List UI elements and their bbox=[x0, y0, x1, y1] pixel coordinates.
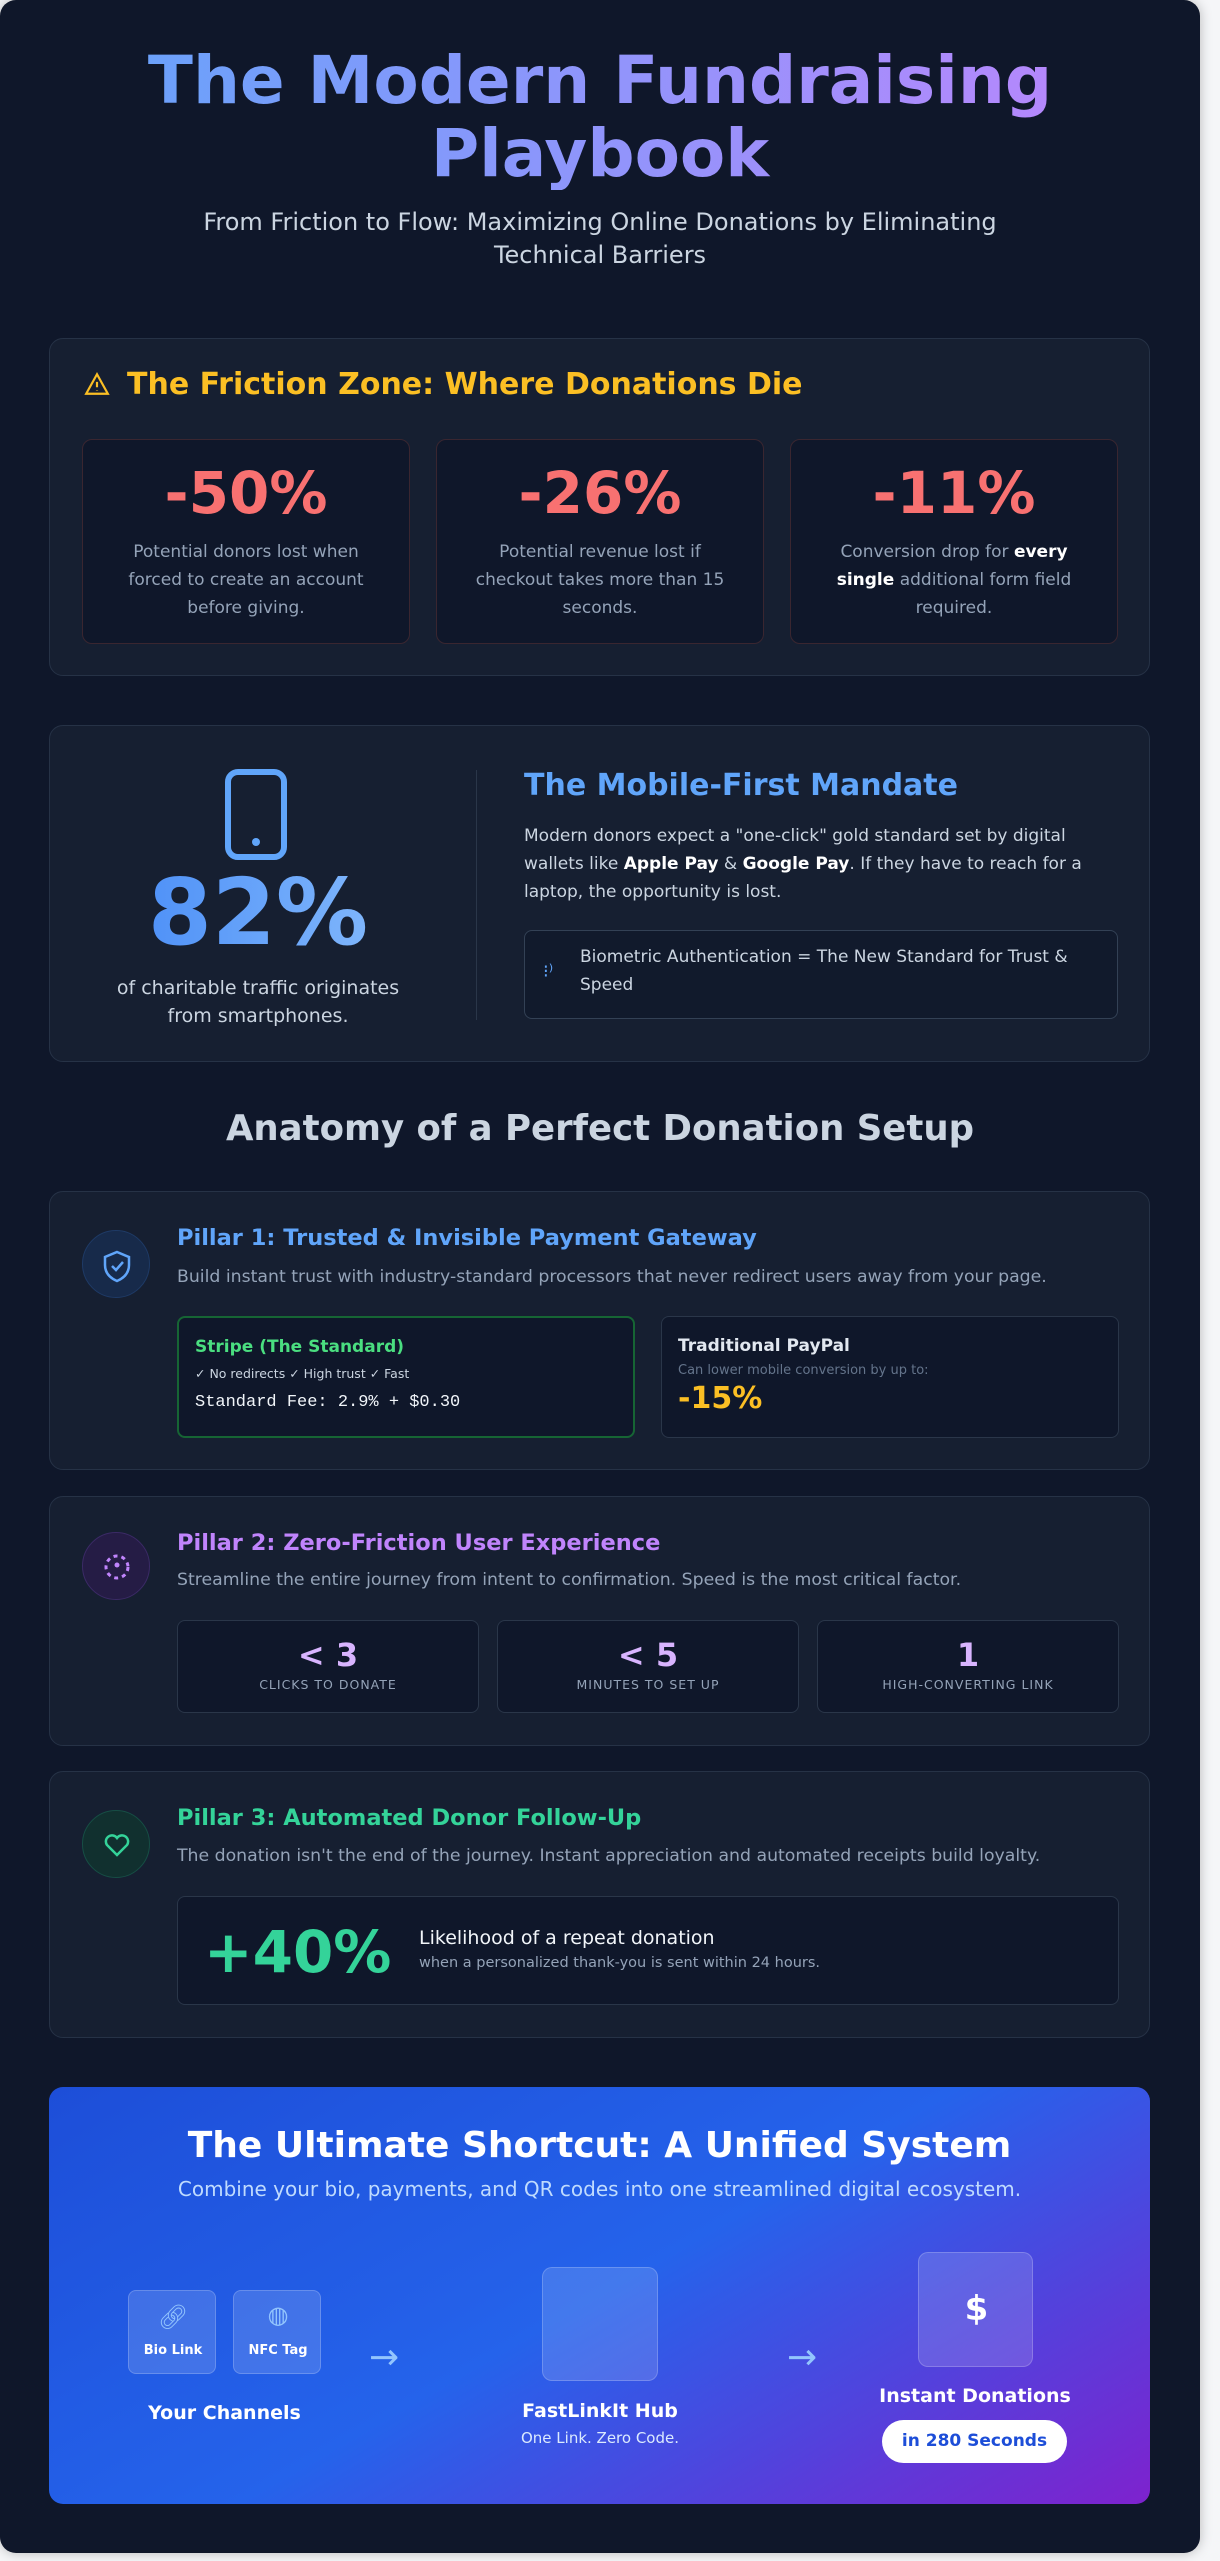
stat card 2 bbox=[436, 439, 764, 644]
icon: phone bbox=[225, 769, 287, 860]
panel: ultimate shortcut bbox=[49, 2087, 1150, 2504]
icon: shield bbox=[82, 1230, 150, 1298]
hub: One Link. Zero Code. bbox=[521, 2429, 679, 2447]
stat card 3: -11% bbox=[873, 459, 1035, 527]
tile: nfc tag: ◍ bbox=[268, 2301, 288, 2329]
hub bbox=[521, 2267, 679, 2447]
channels group bbox=[128, 2290, 321, 2424]
stripe box bbox=[177, 1316, 635, 1438]
stat card 1: Potential donors lost when forced to create an account before giving. bbox=[128, 542, 364, 618]
label: your channels: Your Channels bbox=[148, 2402, 301, 2424]
big stat 82% bbox=[50, 858, 466, 968]
stripe box: ✓ No redirects ✓ High trust ✓ Fast bbox=[195, 1366, 409, 1381]
pill: in 280 Seconds bbox=[902, 2431, 1047, 2451]
stat: link: 1 bbox=[957, 1636, 979, 1674]
cta subtitle: Combine your bio, payments, and QR codes into one streamlined digital ecosystem. bbox=[178, 2177, 1021, 2201]
pillar 2 title: Pillar 2: Zero-Friction User Experience bbox=[177, 1530, 660, 1556]
stat card 3: Conversion drop for every single additional form field required. bbox=[837, 542, 1071, 618]
instant donations: Instant Donations bbox=[879, 2385, 1071, 2407]
stat: clicks: CLICKS TO DONATE bbox=[259, 1677, 397, 1692]
tile: nfc tag bbox=[233, 2290, 321, 2374]
repeat donation box: Likelihood of a repeat donation bbox=[419, 1927, 715, 1949]
title: Playbook bbox=[431, 115, 769, 192]
big stat 82%: 82% bbox=[148, 859, 368, 966]
pillar 3 title: Pillar 3: Automated Donor Follow-Up bbox=[177, 1805, 641, 1831]
tile: bio link: 🔗︎ bbox=[158, 2303, 188, 2331]
caption: of charitable traffic originates from smartphones. bbox=[117, 977, 399, 1027]
stat: clicks: < 3 bbox=[298, 1636, 358, 1674]
cta title: The Ultimate Shortcut: A Unified System bbox=[188, 2125, 1011, 2166]
pillar 1 desc: Build instant trust with industry-standard processors that never redirect users away from your page. bbox=[177, 1267, 1047, 1287]
pillar 3 desc: The donation isn't the end of the journey. Instant appreciation and automated receipts build loyalty. bbox=[177, 1846, 1040, 1866]
panel: pillar 3 bbox=[49, 1771, 1150, 2038]
stat card 2: Potential revenue lost if checkout takes more than 15 seconds. bbox=[476, 542, 724, 618]
title: The Modern Fundraising bbox=[148, 42, 1052, 119]
arrow 1: → bbox=[369, 2337, 399, 2378]
callout: biometric bbox=[524, 930, 1118, 1019]
stat card 1: -50% bbox=[165, 459, 327, 527]
stat: clicks bbox=[177, 1620, 479, 1713]
icon: focus bbox=[82, 1532, 150, 1600]
instant donations: $ bbox=[965, 2289, 988, 2329]
paypal box: Can lower mobile conversion by up to: bbox=[678, 1363, 929, 1378]
icon: fingerprint: ⁝⁾ bbox=[543, 961, 553, 982]
stat card 3 bbox=[790, 439, 1118, 644]
panel: pillar 2 bbox=[49, 1496, 1150, 1746]
callout: biometric: Biometric Authentication = The New Standard for Trust & Speed bbox=[580, 947, 1068, 995]
pillar 2 desc: Streamline the entire journey from intent to confirmation. Speed is the most critical factor. bbox=[177, 1570, 961, 1590]
tile: bio link: Bio Link bbox=[144, 2343, 202, 2358]
paragraph: Modern donors expect a "one-click" gold standard set by digital wallets like Apple Pay & Google Pay. If they have to reach for a laptop, the opportunity is lost. bbox=[524, 826, 1082, 902]
stripe box: Stripe (The Standard) bbox=[195, 1337, 404, 1357]
panel: mobile-first bbox=[49, 725, 1150, 1062]
tile: bio link bbox=[128, 2290, 216, 2374]
stripe box: Standard Fee: 2.9% + $0.30 bbox=[195, 1393, 460, 1412]
panel: pillar 1 bbox=[49, 1191, 1150, 1470]
stat: minutes: < 5 bbox=[618, 1636, 678, 1674]
heading: anatomy: Anatomy of a Perfect Donation Setup bbox=[226, 1108, 974, 1149]
paypal box: Traditional PayPal bbox=[678, 1336, 850, 1356]
repeat donation box: when a personalized thank-you is sent within 24 hours. bbox=[419, 1955, 820, 1971]
subtitle: From Friction to Flow: Maximizing Online Donations by Eliminating Technical Barriers bbox=[203, 208, 997, 269]
paypal box bbox=[661, 1316, 1119, 1438]
stat: link: HIGH-CONVERTING LINK bbox=[882, 1677, 1054, 1692]
hub: FastLinkIt Hub bbox=[522, 2400, 678, 2422]
repeat donation box: +40% bbox=[204, 1918, 391, 1986]
stat: minutes bbox=[497, 1620, 799, 1713]
pillar 1 title: Pillar 1: Trusted & Invisible Payment Gateway bbox=[177, 1225, 757, 1251]
instant donations bbox=[879, 2252, 1071, 2463]
heading: friction zone: The Friction Zone: Where Donations Die bbox=[127, 367, 803, 402]
stat card 2: -26% bbox=[519, 459, 681, 527]
stat card 1 bbox=[82, 439, 410, 644]
pill bbox=[882, 2420, 1067, 2463]
title bbox=[0, 44, 1200, 190]
icon: heart bbox=[82, 1810, 150, 1878]
arrow 2: → bbox=[787, 2337, 817, 2378]
paypal box: -15% bbox=[678, 1381, 762, 1416]
repeat donation box bbox=[177, 1896, 1119, 2005]
tile: nfc tag: NFC Tag bbox=[248, 2343, 308, 2358]
panel: friction zone bbox=[49, 338, 1150, 676]
heading: mobile-first mandate: The Mobile-First Mandate bbox=[524, 768, 958, 803]
stat: link bbox=[817, 1620, 1119, 1713]
stat: minutes: MINUTES TO SET UP bbox=[576, 1677, 720, 1692]
